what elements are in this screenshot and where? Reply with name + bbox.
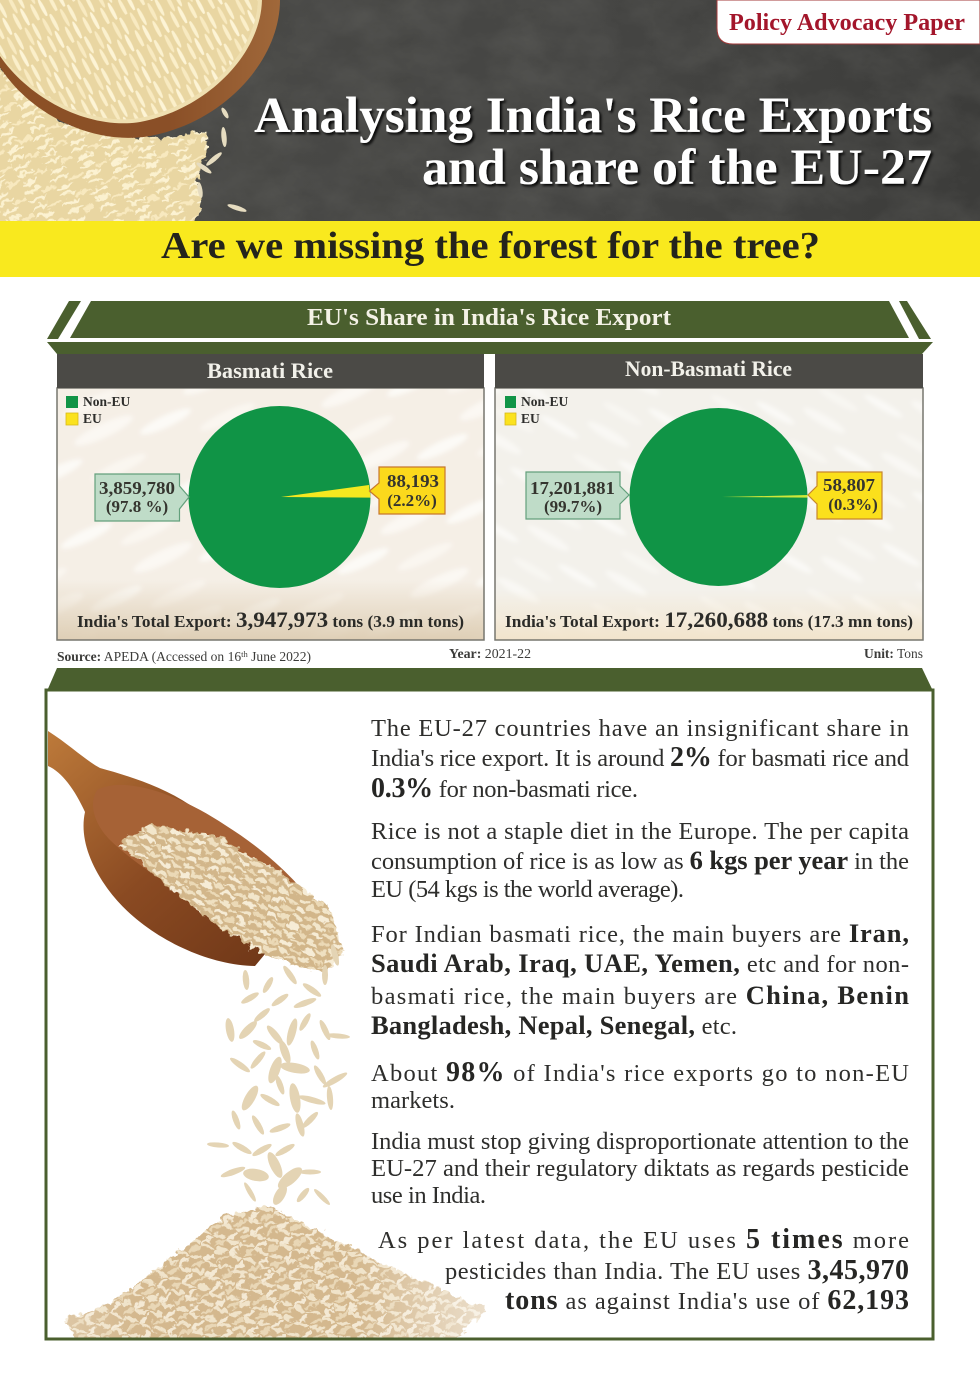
section banner: EU's Share in India's Rice Export: EU's Share in India's Rice Export <box>307 305 671 331</box>
photo: rice pile <box>44 1200 932 1350</box>
text block: recommendation: India must stop giving disproportionate attention to the <box>371 1128 909 1155</box>
panel heading: Non-Basmati Rice <box>625 356 792 381</box>
text block: consumption: Rice is not a staple diet in the Europe. The per capita <box>371 818 909 845</box>
source note: June 2022) <box>248 649 311 664</box>
tag: Policy Advocacy Paper <box>717 0 980 44</box>
pie chart <box>188 406 370 588</box>
panel: key messages <box>44 668 933 1350</box>
subtitle band <box>0 221 980 277</box>
text block: recommendation: EU-27 and their regulatory diktats as regards pesticide <box>371 1155 909 1182</box>
tag: Policy Advocacy Paper: Policy Advocacy Paper <box>729 10 965 36</box>
text block: consumption <box>371 818 909 903</box>
text block: main buyers: Bangladesh, Nepal, Senegal, etc. <box>371 1010 737 1040</box>
callout: EU value <box>370 467 445 514</box>
header banner <box>0 0 980 233</box>
photo: spilled rice <box>0 50 206 232</box>
panel heading: Basmati Rice <box>207 358 333 383</box>
text block: recommendation: use in India. <box>371 1182 486 1209</box>
text block: main buyers <box>371 918 909 1040</box>
text block: EU share <box>371 715 909 804</box>
text block: main buyers: For Indian basmati rice, the main buyers are Iran, <box>371 918 909 948</box>
text block: pesticide data <box>378 1224 909 1316</box>
panel: Non-Basmati Rice <box>483 354 935 652</box>
legend: Non-EU <box>83 394 131 409</box>
text block: main buyers: basmati rice, the main buyers are China, Benin <box>371 980 909 1010</box>
legend: Non-EU <box>521 394 569 409</box>
text block: EU share: 0.3% for non-basmati rice. <box>371 773 638 804</box>
text block: consumption: EU (54 kgs is the world average). <box>371 876 684 903</box>
photo: wooden bowl of rice <box>0 0 280 138</box>
photo: wooden scoop <box>48 731 310 966</box>
callout: EU value: (2.2%) <box>387 491 437 510</box>
photo: loose rice grains <box>195 107 247 213</box>
callout: EU value <box>808 472 882 519</box>
title <box>254 88 932 196</box>
source note: th <box>241 649 249 659</box>
legend <box>66 394 131 426</box>
source note: Source: APEDA (Accessed on 16 <box>57 649 241 664</box>
legend <box>505 394 569 426</box>
text block: consumption: consumption of rice is as low as 6 kgs per year in the <box>371 845 909 875</box>
legend: EU <box>521 411 540 426</box>
callout: non-EU value <box>95 474 189 521</box>
text block: pesticide data: As per latest data, the EU uses 5 times more <box>378 1224 909 1255</box>
text block: EU share: India's rice export. It is around 2% for basmati rice and <box>371 742 909 773</box>
photo: falling rice grains <box>207 944 350 1207</box>
text block: main buyers: Saudi Arab, Iraq, UAE, Yemen, etc and for non- <box>371 948 909 978</box>
legend: EU <box>83 411 102 426</box>
subtitle band: Are we missing the forest for the tree? <box>161 225 820 267</box>
callout: non-EU value: 3,859,780 <box>99 478 175 498</box>
photo: rice in scoop <box>115 823 340 972</box>
callout: non-EU value <box>526 472 629 519</box>
unit note: Unit: Tons <box>864 646 923 661</box>
text block: EU share: The EU-27 countries have an insignificant share in <box>371 715 909 742</box>
text block: pesticide data: tons as against India's use of 62,193 <box>505 1285 909 1316</box>
text block: recommendation <box>371 1128 909 1209</box>
callout: non-EU value: 17,201,881 <box>530 478 615 498</box>
text block: 98 percent: markets. <box>371 1087 455 1114</box>
callout: non-EU value: (97.8 %) <box>106 497 168 516</box>
total export: India's Total Export: 3,947,973 tons (3.9 mn tons) <box>77 607 464 632</box>
callout: non-EU value: (99.7%) <box>544 497 602 516</box>
title: Analysing India's Rice Exports <box>254 88 932 144</box>
year note: Year: 2021-22 <box>449 646 531 661</box>
callout: EU value: 88,193 <box>387 471 439 491</box>
panel: Basmati Rice <box>45 354 496 652</box>
text block: pesticide data: pesticides than India. The EU uses 3,45,970 <box>445 1255 909 1286</box>
title: and share of the EU-27 <box>422 140 932 196</box>
callout: EU value: (0.3%) <box>828 495 878 514</box>
section banner: EU's Share in India's Rice Export <box>47 301 933 354</box>
callout: EU value: 58,807 <box>823 475 875 495</box>
text block: 98 percent <box>371 1057 909 1114</box>
total export: India's Total Export: 17,260,688 tons (17.3 mn tons) <box>505 607 913 632</box>
text block: 98 percent: About 98% of India's rice exports go to non-EU <box>371 1057 909 1088</box>
pie chart <box>630 408 808 586</box>
